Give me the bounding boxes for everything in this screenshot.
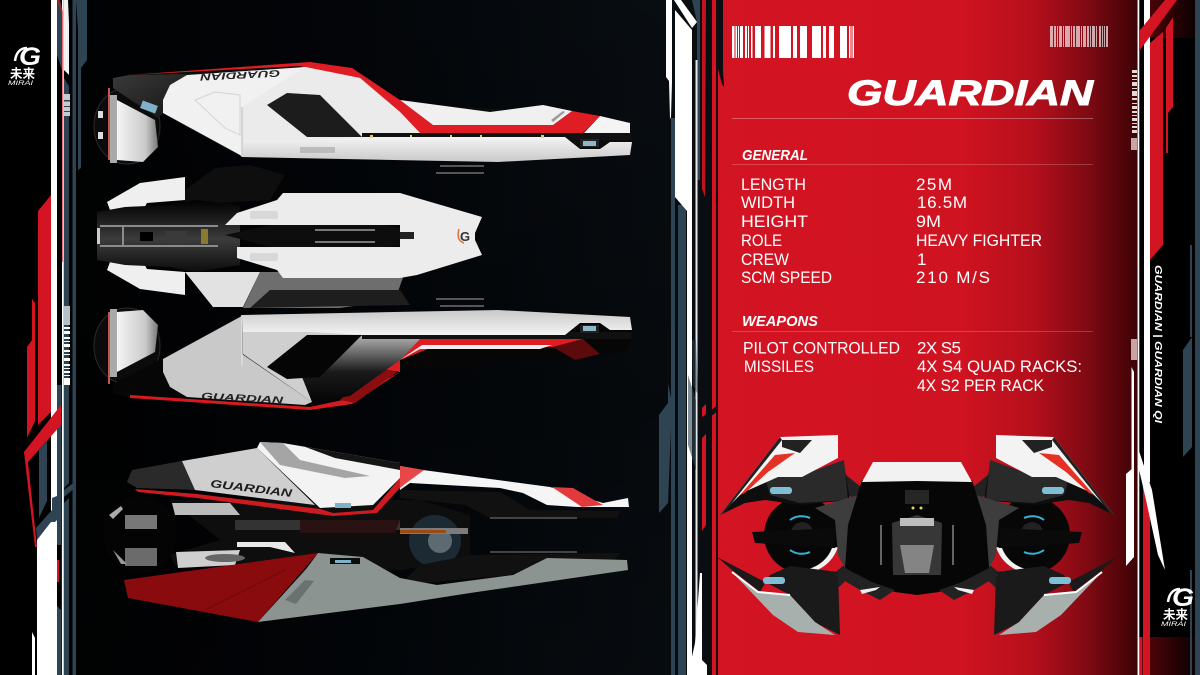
upper wing grey panel xyxy=(182,448,315,505)
hull silhouette xyxy=(113,62,632,162)
white rear lobes xyxy=(107,177,185,210)
yellow lights xyxy=(370,135,544,138)
upper wing tail xyxy=(127,461,197,490)
main white panel xyxy=(163,67,420,157)
blue screen xyxy=(580,139,599,147)
hull name: GUARDIAN xyxy=(210,478,294,500)
weapon values xyxy=(917,338,1082,395)
missiles xyxy=(436,165,484,174)
cockpit window xyxy=(267,93,362,137)
left strip barcodes xyxy=(64,94,70,385)
general spec labels: SCM SPEED xyxy=(741,268,832,287)
right logo: 未来 xyxy=(1163,607,1188,622)
upper wing xyxy=(720,435,850,515)
heading: general: GENERAL xyxy=(742,147,808,164)
central machinery xyxy=(170,500,470,572)
weapon values: 4X S4 QUAD RACKS: xyxy=(917,357,1082,376)
main barcode xyxy=(732,26,854,58)
centre spine xyxy=(225,225,400,247)
white sliver xyxy=(400,345,552,360)
engine xyxy=(103,496,177,572)
body xyxy=(845,480,917,595)
vertical model names: GUARDIAN | GUARDIAN QI xyxy=(1152,265,1164,424)
general spec values: 9M xyxy=(916,212,941,231)
lower red wing xyxy=(124,553,318,622)
lower grey wing xyxy=(258,553,628,622)
left logo: 未来 xyxy=(10,66,36,81)
weapon labels xyxy=(743,338,900,376)
lower hull xyxy=(243,137,632,162)
general spec labels: LENGTH xyxy=(741,175,806,194)
heading: weapons: WEAPONS xyxy=(742,313,818,330)
tail section xyxy=(113,74,187,118)
ship: top view upper xyxy=(94,62,632,174)
rails xyxy=(97,225,218,247)
cockpit xyxy=(892,515,917,575)
weapon labels: PILOT CONTROLLED xyxy=(743,338,900,358)
left logo: G xyxy=(19,43,41,71)
general spec labels: CREW xyxy=(741,250,789,269)
weapon values: 2X S5 xyxy=(917,338,961,358)
general spec values: 25M xyxy=(916,175,952,194)
panel: right decorative column of dark area xyxy=(659,0,719,675)
upper wing white top xyxy=(257,442,400,508)
side grey panel xyxy=(815,495,858,568)
small barcode xyxy=(1050,26,1108,47)
weapon labels: MISSILES xyxy=(744,357,814,376)
red wing stripe xyxy=(552,487,603,507)
right strip red shapes xyxy=(1140,0,1177,260)
general spec values: HEAVY FIGHTER xyxy=(916,231,1042,250)
cockpit window xyxy=(267,335,362,379)
engine xyxy=(94,88,160,164)
dark upper and lower structure xyxy=(185,165,285,205)
title: GUARDIAN xyxy=(847,74,1094,113)
black strakes xyxy=(400,490,620,585)
weapon values: 4X S2 PER RACK xyxy=(917,376,1045,395)
white swoosh xyxy=(1138,448,1165,570)
navy shapes xyxy=(1183,245,1192,675)
panel: left decorative strip xyxy=(0,0,87,675)
lower wing xyxy=(717,557,840,635)
ship: side view bottom xyxy=(103,442,629,622)
red panel edge barcodes and accents xyxy=(1126,70,1137,566)
ship: underside view middle xyxy=(97,165,482,308)
general spec labels: WIDTH xyxy=(741,193,795,212)
black spine xyxy=(362,133,632,140)
general spec values xyxy=(916,175,1042,287)
forward hull xyxy=(225,193,482,278)
general spec values: 16.5M xyxy=(917,193,967,212)
ship: front view xyxy=(717,435,1117,635)
upper white deck xyxy=(400,100,572,125)
red edge line xyxy=(135,478,400,516)
general spec labels: ROLE xyxy=(741,231,782,250)
right logo xyxy=(1161,584,1194,628)
G emblem: G xyxy=(460,229,470,244)
general spec values: 1 xyxy=(917,250,926,269)
panel: red specification panel xyxy=(716,0,1137,675)
grey panel xyxy=(163,315,312,405)
right logo: G xyxy=(1172,584,1194,612)
left logo: MIRAI xyxy=(8,80,33,87)
struts xyxy=(820,470,862,595)
hull name upside down: GUARDIAN xyxy=(198,67,280,82)
forward white wing xyxy=(400,466,629,507)
left strip red shapes xyxy=(24,195,61,582)
red lower edge xyxy=(130,372,400,410)
black spine xyxy=(362,332,632,339)
nose xyxy=(583,116,630,134)
central fuselage xyxy=(97,200,240,272)
ship: top view lower xyxy=(94,298,632,410)
general spec values: 210 M/S xyxy=(916,268,990,287)
general spec labels: HEIGHT xyxy=(741,212,808,231)
engine xyxy=(94,308,160,384)
arm xyxy=(752,528,835,548)
right logo: MIRAI xyxy=(1161,621,1186,628)
left logo xyxy=(8,43,41,87)
panel: right decorative strip xyxy=(1137,0,1200,675)
red top edge xyxy=(130,62,600,133)
cockpit sphere xyxy=(400,515,468,567)
hull silhouette xyxy=(113,310,632,410)
general spec labels xyxy=(741,175,832,287)
upper hull xyxy=(243,310,632,335)
hull name: GUARDIAN xyxy=(201,391,285,406)
engine wheel xyxy=(764,497,840,573)
